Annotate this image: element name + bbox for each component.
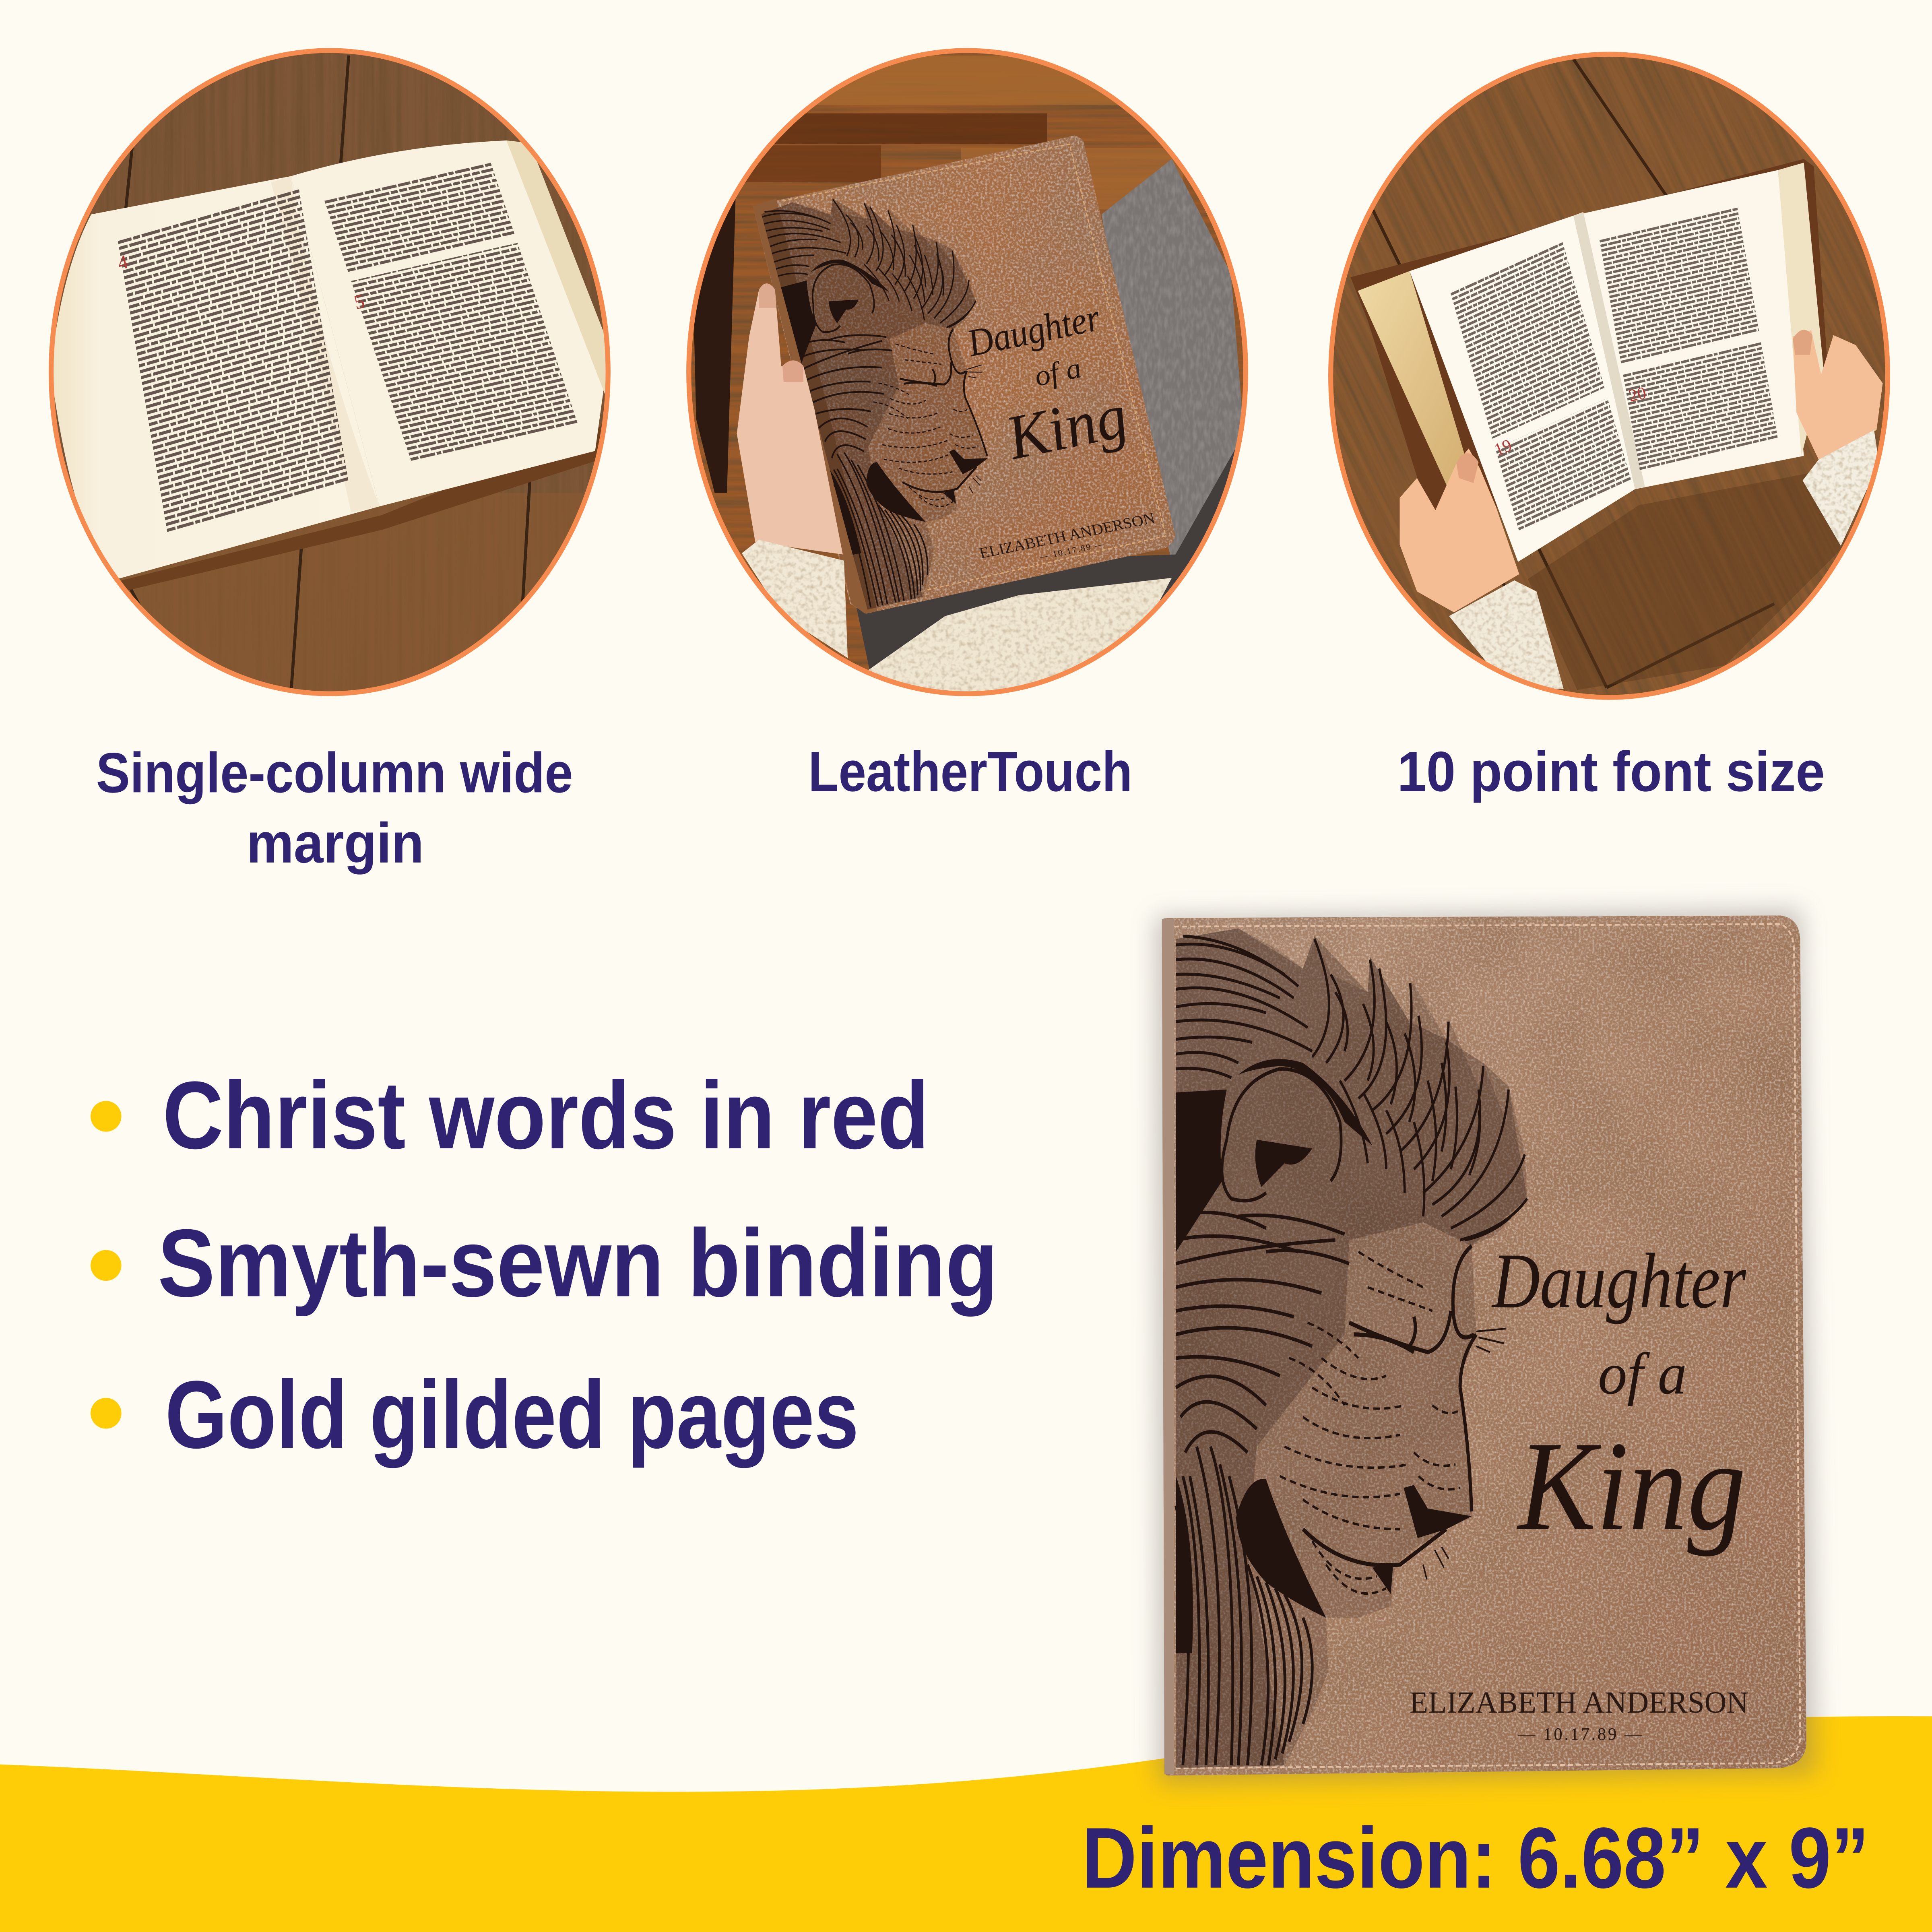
engraved name and date: ELIZABETH ANDERSON (1410, 1685, 1748, 1719)
photo panel: hand holding leather cover: of a (1031, 352, 1085, 392)
photo panel: hand holding leather cover: ELIZABETH ANDERSON (978, 510, 1157, 562)
engraved title: of a (1598, 1341, 1687, 1406)
lion engraving (1176, 929, 1527, 1768)
feature: Smyth-sewn binding: Smyth-sewn binding (158, 1209, 998, 1317)
feature list (91, 1061, 998, 1468)
feature: Christ words in red: Christ words in red (163, 1061, 929, 1169)
photo panel: hands holding open Bible: 20 (1627, 384, 1648, 406)
photo panel: hand holding leather cover: — 10.17.89 — (1038, 539, 1106, 562)
feature: Gold gilded pages: Gold gilded pages (165, 1361, 859, 1468)
caption: single-column: Single-column wide (96, 741, 573, 804)
yellow wave band (0, 1716, 1932, 1932)
engraved title: King (1516, 1415, 1746, 1557)
caption: margin: margin (246, 811, 424, 875)
photo panel: hands holding open Bible: 19 (1492, 436, 1515, 460)
photo panel: hand holding leather cover: Daughter (962, 296, 1105, 365)
engraved name and date: — 10.17.89 — (1517, 1725, 1644, 1744)
photo panel: hand holding leather cover: King (998, 381, 1135, 473)
photo panel: open Bible single-column page (37, 37, 628, 702)
engraved title (1491, 1237, 1746, 1557)
large leather Bible cover (1156, 909, 1816, 1784)
caption: font size: 10 point font size (1397, 740, 1825, 803)
engraved title: Daughter (1491, 1237, 1746, 1325)
photo panel: hands holding open Bible (1328, 52, 1890, 700)
photo panel: hand holding leather cover (678, 43, 1257, 708)
photo panel: open Bible single-column page: 4 (115, 250, 130, 274)
photo panel: open Bible single-column page: 5 (352, 290, 367, 314)
bullet 2 (91, 1250, 122, 1281)
bullet 1 (91, 1101, 122, 1132)
caption: LeatherTouch: LeatherTouch (808, 740, 1132, 803)
engraved name and date (1410, 1685, 1748, 1744)
bullet 3 (91, 1398, 122, 1428)
